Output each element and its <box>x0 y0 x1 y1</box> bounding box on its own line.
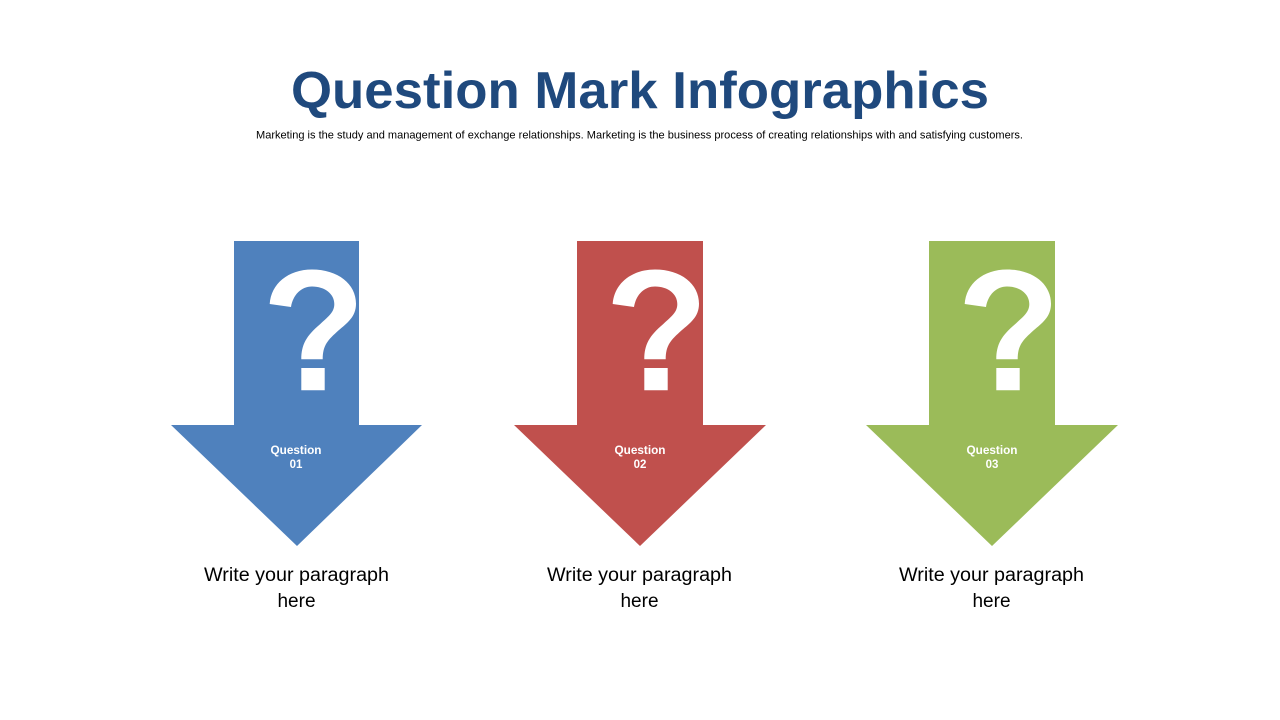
icon: question mark <box>613 270 699 390</box>
panel: question 03 <box>866 241 1118 612</box>
paragraph: Write your paragraph <box>204 565 389 586</box>
icon: question mark <box>965 270 1051 390</box>
paragraph: here <box>620 591 659 612</box>
arrow label: 02 <box>634 459 646 471</box>
arrow label: Question <box>614 445 666 457</box>
panel: question 02 <box>514 241 766 612</box>
arrow label: Question <box>966 445 1018 457</box>
panel: question 01 <box>171 241 422 612</box>
paragraph: Write your paragraph <box>547 565 732 586</box>
arrow label: 01 <box>290 459 303 471</box>
arrow label: Question <box>270 445 322 457</box>
paragraph: here <box>277 591 316 612</box>
title: Question Mark Infographics <box>291 62 989 120</box>
arrow label: 03 <box>986 459 998 471</box>
subtitle: Marketing is the study and management of exchange relationships. Marketing is the business process of creating relationships with and satisfying customers. <box>256 130 1023 142</box>
arrow: green <box>866 241 1118 546</box>
icon: question mark <box>270 270 356 390</box>
paragraph: here <box>972 591 1011 612</box>
arrow: red <box>514 241 766 546</box>
arrow: blue <box>171 241 422 546</box>
paragraph: Write your paragraph <box>899 565 1084 586</box>
